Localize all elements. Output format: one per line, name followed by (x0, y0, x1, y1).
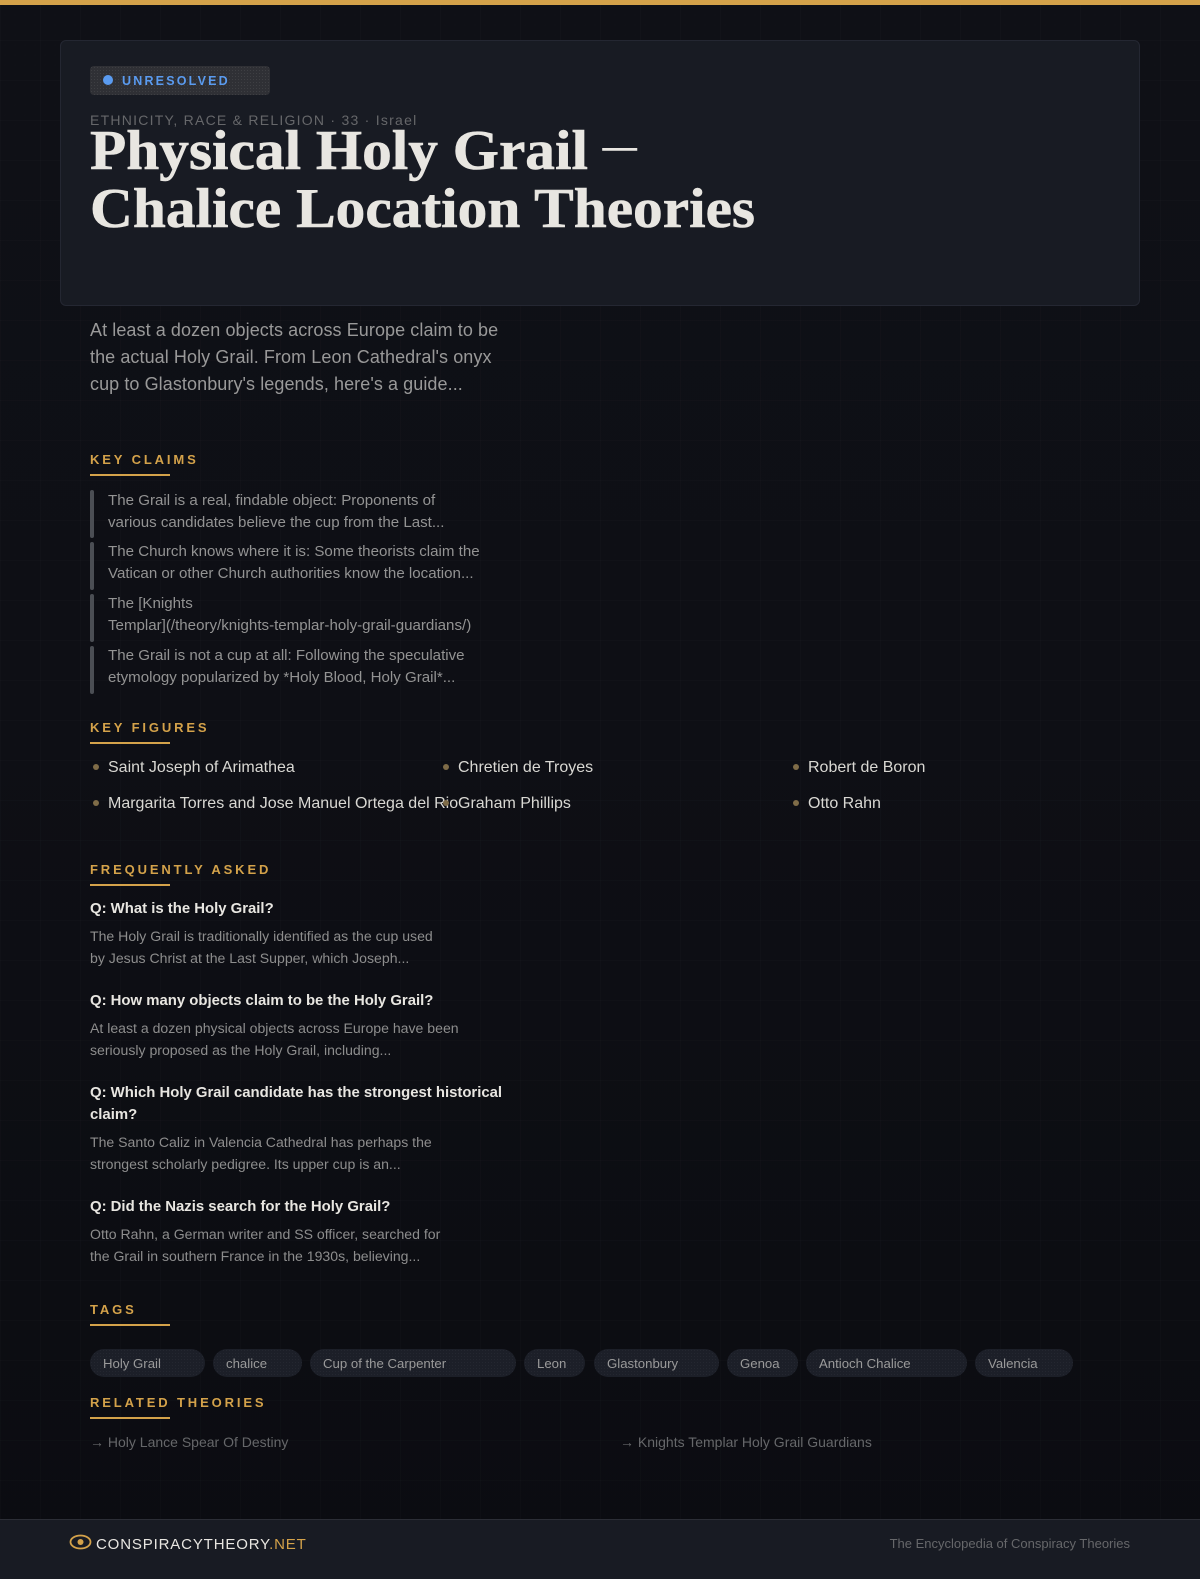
summary text: the actual Holy Grail. From Leon Cathedral's onyx (90, 347, 492, 367)
figure list: Robert de Boron (808, 759, 925, 776)
tag pills: Leon (537, 1356, 566, 1371)
figure list: Otto Rahn (808, 795, 881, 812)
footer tagline: The Encyclopedia of Conspiracy Theories (890, 1536, 1130, 1551)
panel: header card (60, 40, 1140, 306)
tag pills: Holy Grail (103, 1356, 161, 1371)
figure list: Chretien de Troyes (458, 759, 593, 776)
faq 4: Otto Rahn, a German writer and SS officer, searched for (90, 1226, 440, 1242)
claim 1: The Grail is a real, findable object: Proponents of (108, 492, 435, 509)
heading: key claims: KEY CLAIMS (90, 452, 199, 467)
tag pills: chalice (226, 1356, 267, 1371)
faq 2: seriously proposed as the Holy Grail, including... (90, 1042, 391, 1058)
faq 3: Q: Which Holy Grail candidate has the strongest historical (90, 1085, 502, 1101)
title: Chalice Location Theories (90, 178, 755, 240)
claim 1: various candidates believe the cup from the Last... (108, 514, 444, 531)
related theory links: → Holy Lance Spear Of Destiny (90, 1434, 288, 1450)
figure list (93, 759, 925, 812)
claim 2 (90, 542, 480, 590)
tag pills: Genoa (740, 1356, 780, 1371)
figure list: Graham Phillips (458, 795, 571, 812)
faq 1: Q: What is the Holy Grail? (90, 901, 274, 917)
figure list: Saint Joseph of Arimathea (108, 759, 295, 776)
summary text (90, 320, 498, 394)
related theory links (90, 1434, 872, 1450)
top accent bar (0, 0, 1200, 5)
claim 4: etymology popularized by *Holy Blood, Holy Grail*... (108, 669, 455, 686)
figure list: Margarita Torres and Jose Manuel Ortega del Rio (108, 795, 458, 812)
faq 2: At least a dozen physical objects across Europe have been (90, 1020, 459, 1036)
icon: status dot (103, 75, 113, 85)
title (90, 120, 755, 240)
claim 4: The Grail is not a cup at all: Following the speculative (108, 647, 465, 664)
claim 3 (90, 594, 471, 642)
faq 3: The Santo Caliz in Valencia Cathedral has perhaps the (90, 1134, 432, 1150)
faq 3: strongest scholarly pedigree. Its upper cup is an... (90, 1156, 401, 1172)
faq 3: claim? (90, 1107, 137, 1123)
heading: related theories: RELATED THEORIES (90, 1395, 266, 1410)
icon: eye logo (70, 1534, 92, 1550)
status badge: unresolved (90, 66, 270, 95)
heading: tags: TAGS (90, 1302, 137, 1317)
heading: frequently asked: FREQUENTLY ASKED (90, 862, 271, 877)
claim 2: Vatican or other Church authorities know the location... (108, 565, 474, 582)
panel: footer (0, 1519, 1200, 1579)
faq 3 (90, 1085, 502, 1172)
tag pills: Glastonbury (607, 1356, 678, 1371)
claim 2: The Church knows where it is: Some theorists claim the (108, 543, 480, 560)
heading: key figures: KEY FIGURES (90, 720, 209, 735)
tag pills: Cup of the Carpenter (323, 1356, 446, 1371)
claim 1 (90, 490, 444, 538)
logo wordmark: CONSPIRACYTHEORY.NET (96, 1536, 307, 1553)
badge label: UNRESOLVED (122, 74, 230, 88)
claim 3: Templar](/theory/knights-templar-holy-grail-guardians/) (108, 617, 471, 634)
tag pills: Valencia (988, 1356, 1038, 1371)
faq 1: by Jesus Christ at the Last Supper, which Joseph... (90, 950, 409, 966)
faq 1: The Holy Grail is traditionally identified as the cup used (90, 928, 433, 944)
category and location line: ETHNICITY, RACE & RELIGION · 33 · Israel (90, 112, 417, 128)
title: Physical Holy Grail — (90, 120, 637, 182)
tag pills (90, 1349, 1073, 1377)
faq 1 (90, 901, 433, 966)
summary text: At least a dozen objects across Europe claim to be (90, 320, 498, 340)
faq 4: the Grail in southern France in the 1930s, believing... (90, 1248, 420, 1264)
faq 2: Q: How many objects claim to be the Holy Grail? (90, 993, 433, 1009)
tag pills: Antioch Chalice (819, 1356, 911, 1371)
summary text: cup to Glastonbury's legends, here's a guide... (90, 374, 463, 394)
faq 2 (90, 993, 459, 1058)
claim 4 (90, 646, 465, 694)
faq 4: Q: Did the Nazis search for the Holy Grail? (90, 1199, 390, 1215)
faq 4 (90, 1199, 440, 1264)
claim 3: The [Knights (108, 595, 193, 612)
related theory links: → Knights Templar Holy Grail Guardians (620, 1434, 872, 1450)
